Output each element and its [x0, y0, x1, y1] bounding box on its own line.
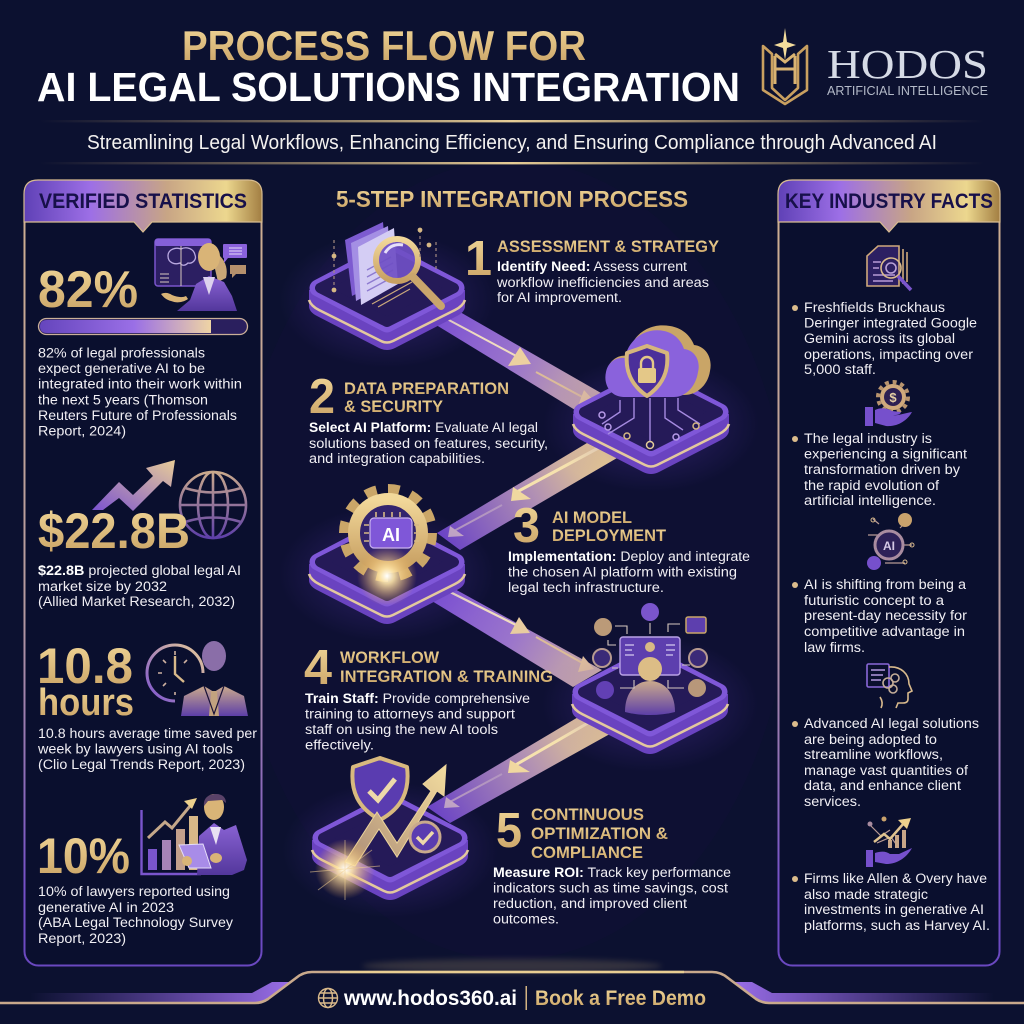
bullet and fact text: services.: [804, 794, 861, 810]
statistic text: expect generative AI to be: [38, 361, 205, 377]
stat: 82%: [38, 239, 248, 440]
icon: growth arrow and globe: [92, 460, 246, 538]
icon: hand holding gear with dollar sign: [865, 382, 912, 426]
icon: document with magnifier: [867, 246, 911, 290]
stat: $22.8B: [38, 460, 246, 610]
logo: Hodos Artificial Intelligence: [763, 28, 988, 104]
footer call to action: Book a Free Demo: [535, 987, 706, 1010]
bullet and fact text: [792, 716, 979, 810]
step 4 description: effectively.: [305, 738, 374, 754]
subtitle: Streamlining Legal Workflows, Enhancing Efficiency, and Ensuring Compliance through Advanced AI: [87, 131, 937, 154]
bullet and fact text: The legal industry is: [804, 431, 932, 447]
step 5 heading: OPTIMIZATION &: [531, 824, 668, 843]
statistic text: $22.8B projected global legal AI: [38, 563, 241, 579]
step 3 heading: DEPLOYMENT: [552, 526, 667, 545]
bullet and fact text: data, and enhance client: [804, 778, 961, 794]
icon: shield monogram with star: [763, 28, 807, 104]
title: PROCESS FLOW FOR: [182, 22, 586, 69]
statistic text: (Allied Market Research, 2032): [38, 594, 235, 610]
fact 1: [792, 246, 977, 378]
statistic text: 82% of legal professionals: [38, 346, 205, 362]
bullet and fact text: manage vast quantities of: [804, 763, 968, 779]
step 3 description: [508, 549, 750, 596]
statistic text: week by lawyers using AI tools: [37, 742, 233, 758]
step 2 description: [309, 420, 548, 467]
step number 1: 1: [465, 232, 492, 286]
step 3 heading: AI MODEL: [552, 508, 632, 527]
panel header: [24, 180, 262, 232]
bullet and fact text: [792, 300, 977, 378]
step 1: assessment and strategy: [279, 222, 720, 368]
bullet and fact text: artificial intelligence.: [804, 493, 936, 509]
statistic text: [37, 726, 257, 773]
bullet and fact text: transformation driven by: [804, 462, 961, 478]
illustration: documents and magnifier on platform: [279, 222, 495, 368]
bullet and fact text: [792, 577, 967, 656]
step 1 description: Identify Need: Assess current: [497, 259, 687, 275]
illustration: shield, rising arrow and check on platform: [282, 758, 498, 918]
step 5 description: indicators such as time savings, cost: [493, 881, 728, 897]
bullet and fact text: are being adopted to: [804, 732, 937, 748]
step number 3: 3: [513, 499, 540, 553]
illustration: AI gear on platform: [279, 489, 495, 642]
icon: hand holding gear with dollar sign: $: [889, 390, 897, 405]
step 3 heading: [552, 508, 667, 545]
step 5: continuous optimization and compliance: [282, 758, 731, 928]
step 3: AI model deployment: [279, 489, 750, 642]
fact 2: [792, 382, 967, 509]
step 2 heading: & SECURITY: [344, 397, 444, 416]
statistic text: market size by 2032: [38, 579, 167, 595]
icon: presenter with AI screen: [155, 239, 247, 311]
step 2 heading: [344, 379, 509, 416]
step 5 heading: COMPLIANCE: [531, 843, 643, 862]
step 4 heading: [340, 648, 553, 686]
statistic text: 10% of lawyers reported using: [38, 884, 230, 900]
panel header: KEY INDUSTRY FACTS: [785, 190, 993, 213]
panel header: VERIFIED STATISTICS: [39, 190, 247, 213]
bullet and fact text: experiencing a significant: [804, 447, 967, 463]
fact 5: [792, 816, 990, 934]
illustration: cloud, shield and circuits on platform: [543, 325, 759, 492]
statistic text: 10.8 hours average time saved per: [38, 726, 257, 742]
step 4: workflow integration and training: [304, 603, 758, 772]
statistic text: [38, 563, 241, 610]
logo: Hodos Artificial Intelligence: HODOS: [827, 41, 988, 87]
icon: AI network: AI: [883, 539, 895, 553]
icon: hand holding growth chart: [866, 816, 912, 867]
bullet and fact text: operations, impacting over: [804, 347, 973, 363]
statistic text: integrated into their work within: [38, 377, 242, 393]
statistic text: Report, 2024): [38, 424, 126, 440]
step 2 description: Select AI Platform: Evaluate AI legal: [309, 420, 538, 436]
step 1 description: for AI improvement.: [497, 290, 622, 306]
arrow: step 4 to step 5: [427, 713, 617, 823]
title: [37, 22, 740, 110]
logo: Hodos Artificial Intelligence: ARTIFICIAL INTELLIGENCE: [827, 84, 988, 98]
icon: head with brain and document: [867, 664, 912, 708]
step 4 description: staff on using the new AI tools: [305, 722, 498, 738]
bullet and fact text: present-day necessity for: [804, 608, 967, 624]
step number 4: 4: [304, 641, 332, 695]
statistic text: Reuters Future of Professionals: [38, 408, 237, 424]
step 2 heading: DATA PREPARATION: [344, 379, 509, 398]
step 2 description: and integration capabilities.: [309, 451, 485, 467]
step 5 description: outcomes.: [493, 912, 559, 928]
step 1 description: workflow inefficiencies and areas: [496, 275, 709, 291]
step 4 description: Train Staff: Provide comprehensive: [305, 691, 530, 707]
icon: chart with businessman and tablet: [142, 794, 247, 875]
stat: 10.8 hours: [37, 638, 257, 773]
fact 3: [792, 513, 967, 656]
bullet and fact text: investments in generative AI: [804, 902, 984, 918]
stat: 10%: 10%: [37, 828, 130, 884]
bullet and fact text: Gemini across its global: [804, 331, 955, 347]
bullet and fact text: [792, 431, 967, 509]
bullet and fact text: Freshfields Bruckhaus: [804, 300, 945, 316]
bullet and fact text: [792, 871, 990, 934]
bullet and fact text: AI is shifting from being a: [804, 577, 966, 593]
step 5 heading: CONTINUOUS: [531, 805, 644, 824]
step 4 heading: INTEGRATION & TRAINING: [340, 667, 553, 686]
bullet and fact text: Deringer integrated Google: [804, 316, 977, 332]
bullet and fact text: law firms.: [804, 640, 865, 656]
footer website: www.hodos360.ai: [343, 987, 517, 1010]
panel: key industry facts: [778, 180, 1000, 966]
step 5 description: Measure ROI: Track key performance: [493, 865, 731, 881]
step 3 description: the chosen AI platform with existing: [508, 564, 737, 580]
stat: $22.8B: $22.8B: [38, 503, 190, 559]
step number 2: 2: [309, 370, 335, 424]
panel header: [778, 180, 1000, 232]
panel: verified statistics: [24, 180, 262, 966]
step 2 description: solutions based on features, security,: [309, 436, 548, 452]
illustration: person, screen and workflow nodes on platform: [542, 603, 758, 772]
stat: 10.8 hours: 10.8: [37, 638, 133, 694]
statistic text: generative AI in 2023: [38, 900, 174, 916]
step 5 description: [493, 865, 731, 928]
step 3 description: legal tech infrastructure.: [508, 580, 664, 596]
arrow: step 2 to step 3: [437, 443, 617, 550]
statistic text: the next 5 years (Thomson: [38, 392, 208, 408]
bullet and fact text: competitive advantage in: [804, 624, 965, 640]
step 4 heading: WORKFLOW: [340, 648, 440, 667]
icon: globe: [318, 988, 338, 1008]
bullet and fact text: futuristic concept to a: [804, 593, 944, 609]
bullet and fact text: also made strategic: [804, 887, 928, 903]
step 5 description: reduction, and improved client: [493, 896, 687, 912]
statistic text: (ABA Legal Technology Survey: [38, 915, 234, 931]
step 4 description: training to attorneys and support: [305, 706, 515, 722]
bullet and fact text: Firms like Allen & Overy have: [804, 871, 987, 887]
arrow: step 1 to step 2: [428, 308, 608, 413]
bullet and fact text: streamline workflows,: [804, 747, 943, 763]
step 5 heading: [531, 805, 668, 862]
step 1 description: [496, 259, 709, 306]
step 4 description: [305, 691, 530, 754]
fact 4: [792, 664, 979, 810]
statistic text: [38, 884, 234, 947]
statistic text: (Clio Legal Trends Report, 2023): [38, 757, 245, 773]
arrow: step 3 to step 4: [427, 582, 602, 687]
stat: 82%: 82%: [38, 261, 138, 319]
stat: 10%: [37, 794, 247, 947]
icon: clock and businessman: [147, 641, 248, 716]
step number 5: 5: [496, 804, 522, 858]
icon: AI network: [867, 513, 914, 570]
title: AI LEGAL SOLUTIONS INTEGRATION: [37, 64, 740, 110]
bullet and fact text: Advanced AI legal solutions: [804, 716, 979, 732]
bullet and fact text: 5,000 staff.: [804, 362, 876, 378]
statistic text: Report, 2023): [38, 931, 126, 947]
footer bar: [0, 959, 1024, 1010]
statistic text: [38, 346, 242, 440]
illustration: AI gear on platform: AI: [382, 525, 400, 545]
step 3 description: Implementation: Deploy and integrate: [508, 549, 750, 565]
bullet and fact text: platforms, such as Harvey AI.: [804, 918, 990, 934]
step 2: data preparation and security: [309, 325, 759, 492]
progress bar: [38, 318, 248, 334]
heading: 5-step integration process: 5-STEP INTEGRATION PROCESS: [336, 186, 688, 212]
step 1 heading: ASSESSMENT & STRATEGY: [497, 237, 720, 256]
bullet and fact text: the rapid evolution of: [804, 478, 939, 494]
stat: 10.8 hours: hours: [38, 682, 134, 724]
